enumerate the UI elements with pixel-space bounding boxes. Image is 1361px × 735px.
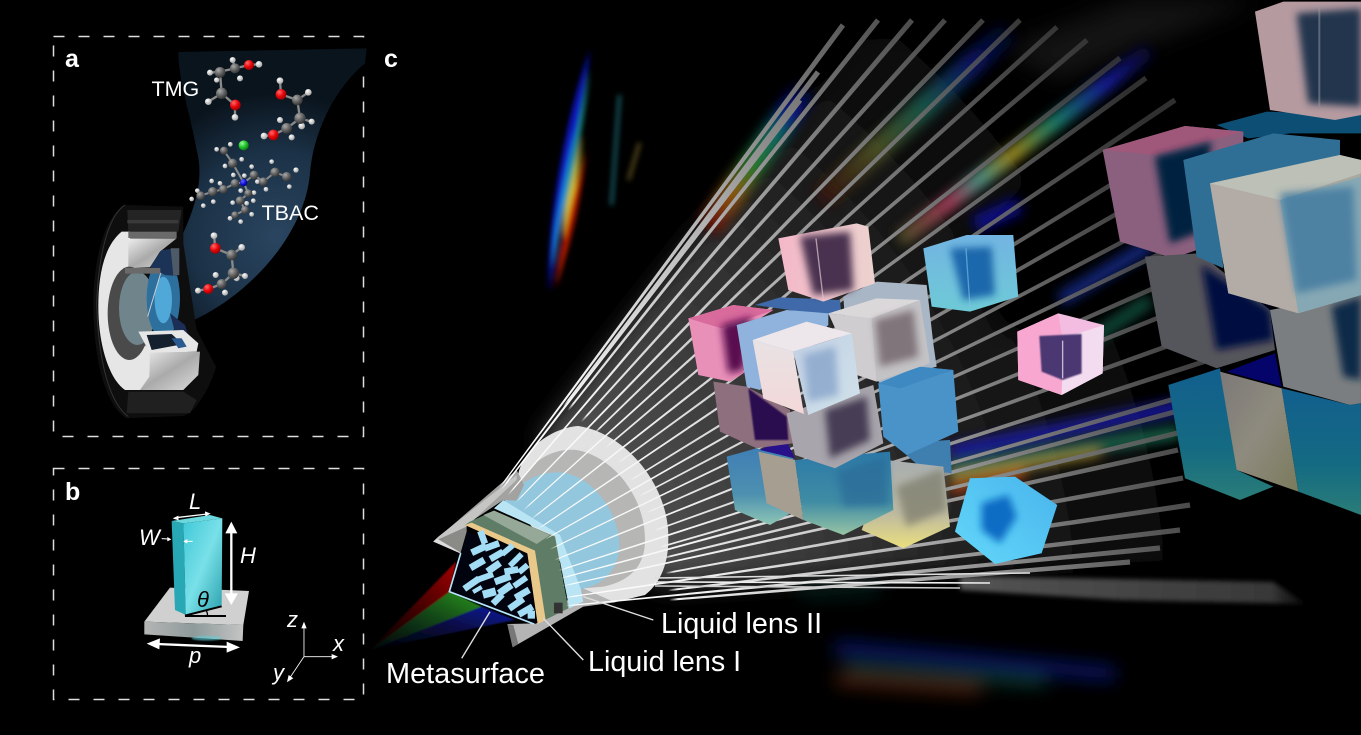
lower wall <box>507 588 615 647</box>
cube: bottom yellow <box>862 460 950 548</box>
panel b <box>54 468 364 700</box>
cube: back blue top <box>755 297 842 317</box>
lens blue elements <box>147 258 180 338</box>
label: z: z <box>286 607 298 632</box>
label: Metasurface <box>386 612 545 690</box>
nanopillar <box>172 515 222 615</box>
metasurface plate <box>450 532 536 624</box>
cube: translucent blue <box>1183 133 1340 268</box>
molecule: TMG bottom <box>195 232 248 296</box>
label: x: x <box>332 631 345 656</box>
panel b frame <box>54 468 364 700</box>
lens lower block <box>138 330 198 353</box>
label: H: H <box>240 543 256 568</box>
panel a frame <box>54 36 364 436</box>
lens inner ring <box>108 267 151 360</box>
label: Liquid lens I <box>543 618 741 678</box>
cube: front pale <box>1210 155 1361 313</box>
axes <box>287 622 338 682</box>
cube: pale top <box>1255 2 1361 120</box>
cube: blue floating <box>923 235 1018 312</box>
panel a <box>54 36 367 436</box>
cube: pale blue behind <box>737 310 828 390</box>
cube: bottom-left blue <box>727 448 793 525</box>
outer lens housing <box>510 426 668 603</box>
label: Liquid lens I: Liquid lens I <box>588 646 741 678</box>
light haze fan <box>540 0 1306 604</box>
arrow: L <box>173 511 211 520</box>
cube: back blue lower <box>893 440 952 473</box>
light rays <box>400 18 1241 622</box>
label: Liquid lens II: Liquid lens II <box>661 608 822 640</box>
label: Metasurface: Metasurface <box>386 658 545 690</box>
cube: pink floating <box>1017 313 1104 395</box>
substrate <box>144 588 249 641</box>
arrows: W <box>162 537 193 544</box>
RGB input cone <box>370 562 515 650</box>
inner lens rings <box>520 450 645 588</box>
purple gap <box>760 438 795 458</box>
liquid volume beam <box>173 48 367 323</box>
spectrum streak: lower <box>800 590 1115 690</box>
panel a label: a <box>65 45 80 73</box>
cube: bottom centre <box>758 452 893 535</box>
cube: bottom tan <box>1220 372 1298 492</box>
lens assembly <box>370 426 668 650</box>
cube: dim grey, lower left <box>1145 253 1275 368</box>
cube: mauve <box>1103 126 1243 258</box>
cube: bottom right teal <box>1282 388 1361 515</box>
tube outer wall <box>433 470 524 548</box>
cube: grey centre <box>787 385 883 468</box>
molecule: TMG top right <box>261 77 315 140</box>
label: p: p <box>188 643 201 668</box>
lens II plane <box>494 500 583 608</box>
lens housing ghost <box>93 205 216 418</box>
cube: cyan floating <box>955 477 1057 564</box>
tan strip <box>465 523 546 624</box>
blue liquid dome <box>503 472 619 607</box>
cube: grey upper right <box>828 298 930 382</box>
arrow: H <box>225 522 238 605</box>
molecule: TBAC <box>189 142 299 224</box>
cube: bottom teal <box>1168 368 1273 500</box>
cube: blue right <box>878 367 958 455</box>
label: TMG: TMG <box>152 77 199 101</box>
lens dark bars <box>128 232 177 238</box>
cube: back blue <box>1217 112 1361 138</box>
central cube cluster <box>688 223 1104 564</box>
cube: pink left <box>688 305 773 382</box>
label: Liquid lens II <box>583 597 822 640</box>
label: TBAC: TBAC <box>262 201 319 225</box>
lens top block <box>128 238 177 268</box>
cube: mauve mid-left <box>713 382 793 448</box>
large blurred cube cluster, right edge <box>1103 2 1361 515</box>
lens white ring <box>98 232 150 390</box>
spectrum streaks: fan <box>708 30 1190 490</box>
atom: chloride <box>239 140 249 150</box>
arrow: p <box>147 638 240 653</box>
metasurface pillars <box>462 530 535 619</box>
panel c label: c <box>384 45 398 73</box>
panel b label: b <box>65 478 80 506</box>
cube: top pink <box>778 223 875 302</box>
cube: centre grey <box>1270 293 1361 405</box>
green lens I plane <box>465 511 568 620</box>
cube: back grey-blue <box>843 282 937 383</box>
navy gap <box>1227 353 1282 387</box>
cube: front white <box>753 322 860 415</box>
molecule: TMG top left <box>205 57 262 121</box>
label: y: y <box>271 660 286 685</box>
angle marks <box>185 606 226 616</box>
spectrum streak: upper left <box>549 50 641 292</box>
label: L: L <box>189 489 201 514</box>
label: theta: θ <box>197 587 209 612</box>
label: W: W <box>139 525 162 550</box>
